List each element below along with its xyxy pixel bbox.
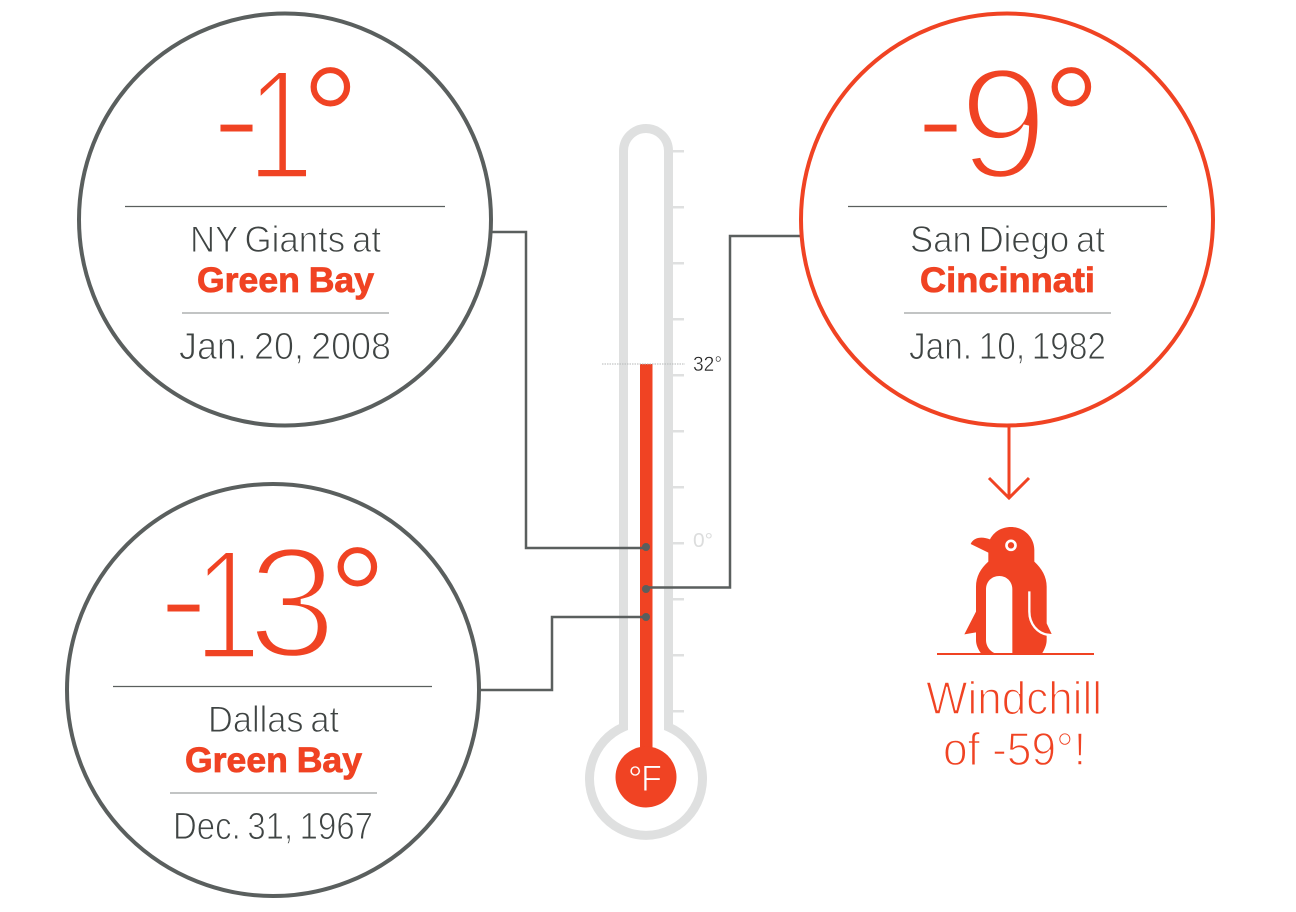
panel: Dallas at Green Bay bbox=[67, 484, 479, 896]
scale ticks bbox=[673, 150, 684, 712]
divider bbox=[904, 312, 1111, 314]
divider bbox=[125, 206, 445, 208]
venue: Green Bay bbox=[185, 741, 363, 780]
panel: NY Giants at Green Bay bbox=[79, 14, 491, 426]
temperature: 9 bbox=[959, 36, 1048, 212]
temperature bbox=[158, 508, 387, 693]
Fahrenheit label bbox=[628, 758, 662, 799]
temperature: 1 bbox=[194, 517, 261, 693]
matchup: NY Giants at bbox=[190, 219, 382, 260]
windchill callout bbox=[926, 672, 1102, 775]
date: Jan. 20, 2008 bbox=[179, 326, 391, 368]
windchill callout: Windchill bbox=[926, 672, 1102, 724]
temperature bbox=[211, 28, 360, 213]
arrow to penguin bbox=[989, 427, 1029, 498]
circle outline bbox=[79, 14, 491, 426]
panel: San Diego at Cincinnati bbox=[801, 14, 1213, 426]
venue: Green Bay bbox=[197, 261, 375, 300]
thermometer bbox=[590, 128, 722, 835]
divider bbox=[113, 686, 432, 688]
circle outline bbox=[67, 484, 479, 896]
temperature: 1 bbox=[247, 37, 314, 213]
Fahrenheit label: ° bbox=[628, 758, 642, 799]
windchill callout: of -59°! bbox=[943, 723, 1086, 775]
0 degree label: 0° bbox=[693, 530, 713, 552]
mercury bulb bbox=[616, 746, 676, 808]
temperature bbox=[915, 28, 1101, 212]
Fahrenheit label: F bbox=[641, 758, 662, 799]
temperature: - bbox=[915, 28, 966, 204]
matchup: San Diego at bbox=[910, 219, 1106, 260]
circle outline bbox=[801, 14, 1213, 426]
32 degree marker line bbox=[602, 363, 685, 365]
temperature: 3 bbox=[248, 515, 337, 691]
icon: penguin bbox=[964, 527, 1052, 654]
32 degree label: 32° bbox=[693, 353, 722, 376]
temperature: - bbox=[158, 508, 209, 684]
connector: Cincinnati 1982 bbox=[642, 236, 800, 593]
temperature: ° bbox=[1042, 37, 1101, 201]
matchup: Dallas at bbox=[208, 699, 340, 740]
divider bbox=[848, 206, 1167, 208]
temperature: ° bbox=[301, 37, 360, 201]
mercury column bbox=[640, 364, 652, 764]
temperature: - bbox=[211, 28, 262, 204]
date: Dec. 31, 1967 bbox=[173, 806, 373, 848]
date: Jan. 10, 1982 bbox=[909, 326, 1106, 368]
divider bbox=[170, 792, 377, 794]
thermometer tube outline bbox=[590, 128, 702, 835]
connector: Green Bay 2008 bbox=[492, 232, 650, 551]
connector: Green Bay 1967 bbox=[480, 613, 650, 690]
venue: Cincinnati bbox=[920, 261, 1095, 300]
temperature: ° bbox=[328, 517, 387, 681]
penguin ground line bbox=[937, 653, 1094, 655]
divider bbox=[182, 312, 389, 314]
